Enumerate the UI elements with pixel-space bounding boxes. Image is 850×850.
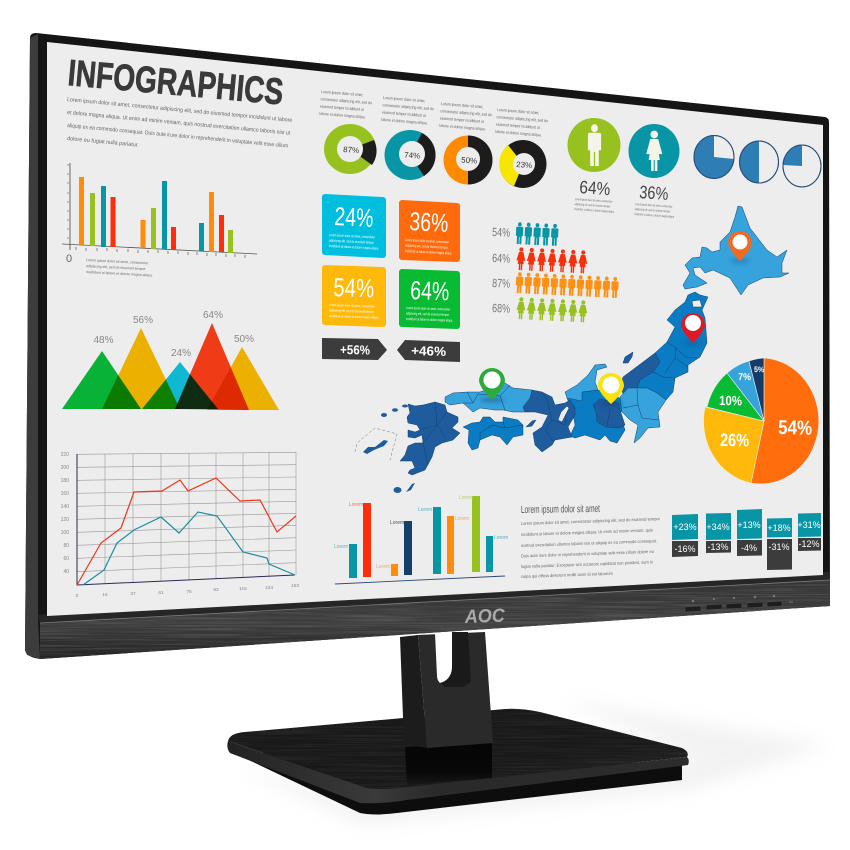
stat box pair 4: +18% (767, 523, 791, 533)
pie chart: 54% (778, 417, 812, 440)
neck reflection on base (405, 743, 492, 785)
map: Kanto (620, 388, 666, 443)
gender stats: adipiscing elit, sed do eiusmod tempor (575, 201, 611, 209)
card 24% (325, 197, 383, 255)
stat box pair 3: -4% (741, 543, 757, 553)
line chart: 40 (63, 569, 69, 575)
top donut captions: consectetur adipiscing elit, sed do (320, 97, 372, 105)
card 36%: 36% (409, 206, 449, 238)
card 24%: Lorem ipsum dolor sit amet, consectetur (329, 233, 376, 239)
monitor body (25, 33, 834, 663)
heading: INFOGRAPHICS: INFOGRAPHICS (66, 52, 285, 113)
line chart: 153 (291, 583, 299, 589)
text block body: fugiat nulla pariatur. Excepteur sint occaecat cupidatat non proident, sunt in (521, 559, 654, 569)
line chart: 61 (158, 590, 164, 596)
card 36%: Lorem ipsum dolor sit amet, consectetur (405, 238, 450, 244)
intro paragraph: aliquip ex ea commodo consequat. Duis aute irure dolor in reprehenderit in voluptate velit esse cillum (67, 123, 289, 150)
text block body: Lorem ipsum dolor sit amet, consectetur adipiscing elit, sed do eiusmod tempor (521, 516, 660, 526)
stat box pair 1: +23% (673, 522, 697, 532)
stat box pair 2: -13% (707, 542, 729, 552)
top donut captions: eiusmod tempor incididunt ut (440, 116, 485, 124)
map: Chugoku (445, 383, 532, 412)
neck front face (418, 632, 493, 748)
gender stats: adipiscing elit, sed do eiusmod tempor (635, 206, 671, 214)
lower bar chart: Lorem (459, 495, 473, 501)
mountain triangle chart: 64% (203, 310, 223, 321)
text block body: incididunt ut labore et dolore magna aliqua. Ut enim ad minim veniam, quis (521, 527, 653, 537)
neck cable slot opening (435, 632, 452, 683)
control buttons (685, 595, 793, 612)
card 54% (325, 268, 383, 324)
stat box pair 5: +31% (797, 520, 821, 530)
neck left face (400, 635, 427, 748)
line chart (61, 452, 299, 599)
gender stats: Lorem ipsum dolor sit amet, consectetur (575, 198, 613, 204)
top donut captions: eiusmod tempor incididunt ut (496, 122, 541, 130)
map: Kanto upper (637, 372, 675, 400)
line chart: 60 (63, 556, 69, 562)
text block body: nostrud exercitation ullamco laboris nisi ut aliquip ex ea commodo consequat. (521, 538, 657, 548)
donut charts: 50% (461, 155, 477, 166)
intro paragraph: Lorem ipsum dolor sit amet, consectetur adipiscing elit, sed do eiusmod tempor incididunt ut labore (67, 97, 292, 124)
lower bar chart: Lorem (376, 564, 390, 570)
card 54%: 54% (333, 272, 375, 303)
stat box pair 5 (797, 513, 821, 551)
card 24%: 24% (334, 201, 374, 233)
line chart: 100 (61, 530, 69, 536)
card 64%: incididunt ut labore et dolore magna aliqua. (406, 317, 453, 323)
intro paragraph (67, 97, 292, 150)
stat box pair 1: -16% (674, 544, 696, 554)
lower bar chart: Lorem (349, 502, 363, 508)
base shadow (240, 700, 830, 825)
stat box pair 4 (767, 518, 792, 570)
stat box pair 3: +13% (737, 520, 761, 530)
top donut captions: eiusmod tempor incididunt ut (382, 110, 427, 118)
stat box pair 3 (737, 509, 762, 556)
grouped bar chart: 0 (66, 253, 72, 265)
text block heading: Lorem ipsum dolor sit amet (521, 503, 600, 516)
lower bar chart: Lorem (390, 520, 404, 526)
line chart: 220 (61, 452, 69, 458)
donut charts: 23% (516, 160, 532, 170)
top donut captions: labore et dolore magna aliqua. (381, 118, 428, 126)
map: Kansai (523, 390, 575, 452)
mountain triangle chart: 24% (171, 348, 191, 359)
up/down stat boxes (672, 509, 821, 570)
base front lip (227, 741, 689, 803)
tag +56% (322, 338, 387, 360)
stat box pair 1 (672, 514, 698, 557)
tag +56%: +56% (340, 342, 371, 358)
pie chart: 5% (754, 365, 764, 374)
grouped bar chart: Lorem ipsum dolor sit amet, consectetur (86, 258, 149, 265)
pin: red (681, 313, 705, 345)
icon: man (568, 118, 620, 172)
lower bar chart (334, 495, 508, 584)
people pictogram rows: 68% (492, 301, 511, 316)
line chart: 76 (186, 589, 192, 595)
lower bezel (40, 580, 830, 659)
tag +46% (397, 340, 460, 362)
line chart: 80 (63, 543, 69, 549)
line chart: 115 (239, 586, 247, 592)
stat cards (325, 197, 457, 326)
gender stats: Lorem ipsum dolor sit amet, consectetur (635, 203, 673, 209)
island: Sado (623, 352, 633, 363)
gender stats (568, 118, 680, 219)
line chart: 93 (213, 587, 219, 593)
AOC logo: AOC (463, 606, 505, 628)
line chart: 0 (76, 593, 79, 599)
card 54%: adipiscing elit, sed do eiusmod tempor (329, 309, 375, 314)
top donut captions: labore et dolore magna aliqua. (319, 112, 366, 120)
lower bar chart: Lorem (334, 544, 348, 550)
card 54%: Lorem ipsum dolor sit amet, consectetur (329, 303, 376, 309)
people pictogram rows: 64% (492, 251, 511, 266)
top donut captions: consectetur adipiscing elit, sed do (382, 103, 434, 111)
top donut captions: Lorem ipsum dolor sit amet, (383, 96, 425, 103)
card 36%: incididunt ut labore et dolore magna aliqua. (405, 249, 452, 255)
donut charts (324, 124, 546, 188)
gender stats: 64% (579, 177, 611, 199)
tag +46%: +46% (411, 343, 447, 359)
base underside (232, 752, 682, 814)
lower bar chart: Lorem (494, 535, 508, 541)
monitor stand and base (225, 632, 830, 825)
top donut captions: Lorem ipsum dolor sit amet, (497, 108, 539, 115)
line chart: 134 (265, 585, 273, 591)
card 36% (402, 203, 457, 259)
map pins (479, 231, 752, 406)
top donut captions: labore et dolore magna aliqua. (439, 124, 486, 132)
grouped bar chart: incididunt ut labore et dolore magna aliqua. (86, 270, 153, 278)
gender stats: incididunt ut labore et dolore magna aliqua (574, 206, 615, 214)
map: southern islands (363, 404, 415, 493)
teal series (83, 512, 295, 585)
people pictogram rows (492, 222, 619, 322)
intro paragraph: dolore eu fugiat nulla pariatur. (67, 136, 139, 149)
top donut captions (319, 90, 549, 138)
map: Chubu south (567, 390, 625, 443)
pin: orange (728, 231, 752, 263)
top donut captions: consectetur adipiscing elit, sed do (496, 115, 548, 123)
line chart: 120 (61, 517, 69, 523)
map: Kyushu (400, 402, 460, 475)
line chart: 140 (61, 504, 69, 510)
card 64% (402, 272, 457, 326)
map of Japan (355, 206, 789, 493)
donut charts: 74% (404, 150, 420, 161)
card 36%: adipiscing elit, sed do eiusmod tempor (405, 244, 449, 250)
map: Hokkaido (683, 206, 789, 295)
donut charts: 87% (343, 145, 359, 155)
outer frame (25, 33, 830, 659)
mountain triangle chart: 56% (133, 315, 153, 326)
card 64%: 64% (410, 275, 450, 306)
left side edge (25, 34, 40, 659)
intro paragraph: et dolore magna aliqua. Ut enim ad minim veniam, quis nostrud exercitation ullamco laboris nisi ut (67, 110, 291, 137)
line chart: 180 (61, 478, 69, 484)
line chart: 37 (130, 591, 136, 597)
red series (77, 478, 296, 585)
stat box pair 5: -12% (798, 539, 820, 549)
pin: yellow (598, 373, 624, 406)
map: Tohoku (653, 292, 708, 378)
text block body: culpa qui officia deserunt mollit anim id est laborum (521, 571, 613, 579)
text block body (521, 516, 660, 579)
line chart: 16 (102, 592, 108, 598)
card 24%: incididunt ut labore et dolore magna aliqua. (329, 244, 379, 251)
people pictogram rows: 54% (492, 225, 511, 240)
base top face (228, 709, 688, 789)
top donut captions: Lorem ipsum dolor sit amet, (441, 102, 483, 109)
card 64%: adipiscing elit, sed do eiusmod tempor (406, 312, 450, 317)
icon: woman (628, 124, 680, 178)
lower bar chart: Lorem (455, 516, 469, 522)
mountain triangle chart (62, 310, 279, 410)
line chart: 200 (61, 465, 69, 471)
map: Hokuriku (565, 364, 607, 401)
grouped bar chart (62, 163, 257, 278)
gender stats: incididunt ut labore et dolore magna aliqua (634, 211, 675, 219)
mountain triangle chart: 48% (93, 335, 114, 346)
stat box pair 2: +34% (706, 522, 730, 532)
stat box pair 4: -31% (768, 542, 790, 552)
map: Niigata (620, 353, 660, 397)
text block body: Duis aute irure dolor in reprehenderit in voluptate velit esse cillum dolore eu (521, 549, 655, 558)
screen background (47, 42, 823, 616)
top donut captions: eiusmod tempor incididunt ut (320, 104, 365, 112)
line chart: 160 (61, 491, 69, 497)
pie chart: 10% (719, 393, 742, 408)
stat box pair 2 (706, 513, 731, 553)
pie chart (704, 358, 819, 484)
top donut captions: consectetur adipiscing elit, sed do (440, 109, 492, 117)
card 24%: adipiscing elit, sed do eiusmod tempor (329, 239, 375, 245)
pie chart: 26% (720, 430, 749, 451)
mountain triangle chart: 50% (234, 334, 254, 345)
people pictogram rows: 87% (492, 276, 511, 291)
top donut captions: Lorem ipsum dolor sit amet, (321, 90, 363, 97)
neck cable slot inner (440, 632, 471, 687)
fraction circles (694, 136, 821, 187)
top donut captions: labore et dolore magna aliqua. (495, 130, 542, 138)
gender stats: 36% (639, 182, 669, 204)
pin: green (479, 368, 505, 402)
lower bar chart: Lorem (418, 507, 432, 513)
card 64%: Lorem ipsum dolor sit amet, consectetur (406, 306, 451, 312)
island: Awaji (526, 420, 536, 427)
card 54%: incididunt ut labore et dolore magna aliqua. (329, 314, 379, 320)
map: Shikoku (463, 417, 523, 450)
pie chart: 7% (738, 372, 751, 383)
grouped bar chart: adipiscing elit, sed do eiusmod tempor (86, 264, 146, 271)
